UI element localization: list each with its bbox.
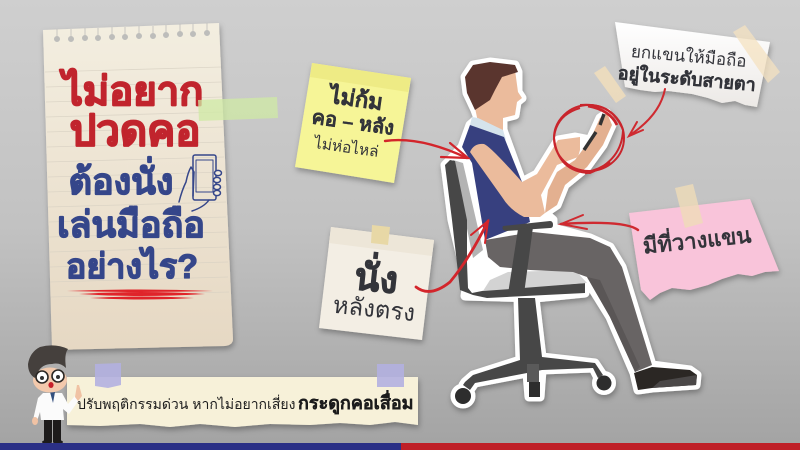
note text: raise phone to eye level: อยู่ในระดับสายตา — [617, 62, 757, 97]
underline scribble — [67, 290, 213, 300]
arrow: to shoulder — [385, 140, 468, 158]
heading: main title: ไม่อยาก — [59, 68, 203, 114]
banner: behaviour warning: กระดูกคอเสื่อม — [298, 390, 414, 415]
note text: neck and back: ไม่ห่อไหล่ — [311, 134, 380, 161]
note text: neck and back: คอ – หลัง — [310, 106, 395, 140]
banner: behaviour warning — [67, 363, 418, 427]
tape: green — [198, 97, 278, 121]
arrow: to phone — [629, 89, 665, 136]
vest — [462, 125, 530, 240]
note text: armrest: มีที่วางแขน — [641, 218, 752, 259]
chair back — [445, 160, 585, 298]
illustration: seated man on office chair — [445, 62, 697, 404]
armrest — [502, 221, 553, 294]
annotation: red phone circle — [554, 105, 624, 173]
neck and head — [465, 62, 522, 132]
heading: main title — [57, 68, 205, 286]
trousers — [485, 232, 652, 372]
note text: sit upright: หลังตรง — [332, 292, 416, 327]
character: doctor — [28, 345, 82, 444]
note text: raise phone to eye level — [617, 40, 759, 97]
heading: main title: เล่นมือถือ — [57, 204, 205, 245]
heading: main title: ปวดคอ — [70, 107, 200, 154]
note: cream sticky — [319, 225, 434, 340]
notebook panel — [43, 23, 233, 350]
footer bar — [0, 443, 800, 450]
heading: main title: อย่างไร? — [66, 246, 198, 286]
note text: raise phone to eye level: ยกแขนให้มือถือ — [630, 41, 747, 71]
shoe — [634, 367, 697, 390]
near arm — [470, 137, 580, 217]
phone — [584, 114, 604, 150]
shirt collar — [470, 117, 506, 140]
far arm — [545, 113, 612, 213]
arrow: to armrest — [561, 215, 638, 230]
chair seat — [483, 270, 587, 291]
hair — [465, 62, 518, 110]
note: pink torn paper — [629, 184, 779, 300]
banner text: ปรับพฤติกรรมด่วน หากไม่อยากเสี่ยง — [77, 395, 295, 412]
arrow: to lower back — [416, 221, 488, 291]
white sticker outline — [445, 62, 697, 404]
note: yellow sticky — [295, 63, 411, 183]
note text: sit upright: นั่ง — [352, 250, 401, 301]
note text: sit upright — [332, 248, 421, 327]
chair base — [455, 298, 612, 404]
note text: neck and back — [307, 80, 399, 163]
icon: hand holding phone — [179, 155, 222, 211]
heading: main title: ต้องนั่ง — [69, 156, 173, 202]
note: white torn paper — [594, 22, 780, 107]
note text: neck and back: ไม่ก้ม — [326, 82, 385, 115]
